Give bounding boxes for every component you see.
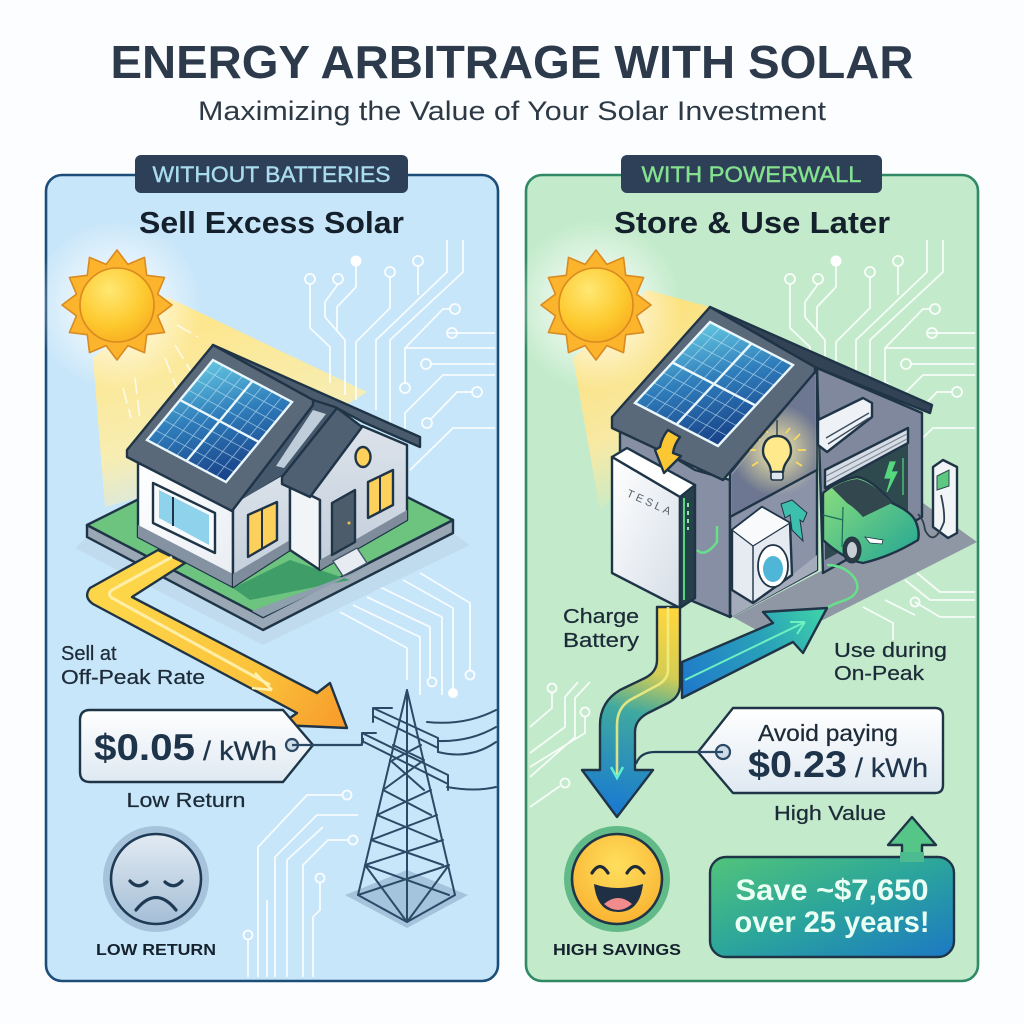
badge: with powerwall: WITH POWERWALL	[642, 162, 862, 187]
large window	[153, 483, 215, 553]
steps	[333, 548, 367, 576]
subtitle: Maximizing the Value of Your Solar Investment	[198, 96, 827, 126]
icon: sun	[32, 220, 202, 390]
logo text: TESLA	[625, 488, 675, 519]
price tag: $0.23 / kWh: / kWh	[855, 753, 928, 783]
beam sparkle rays	[123, 325, 198, 420]
solar panel	[635, 322, 793, 446]
wing side	[290, 470, 320, 570]
lightbulb	[748, 420, 806, 480]
label: sell at off-peak rate: Off-Peak Rate	[61, 667, 205, 689]
side wall	[620, 425, 730, 617]
side wall	[233, 470, 290, 587]
label: use during on-peak: On-Peak	[834, 663, 925, 685]
washing machine	[732, 507, 792, 603]
driveway	[733, 503, 977, 632]
heading: Store & Use Later	[614, 205, 890, 240]
garage interior	[825, 443, 908, 560]
label: charge battery	[563, 606, 639, 652]
solar panel	[147, 360, 292, 482]
powerwall battery	[612, 448, 695, 608]
label: charge battery: Charge	[563, 606, 639, 628]
caption: high value: High Value	[774, 803, 886, 825]
round window	[356, 447, 370, 467]
panel background	[526, 175, 978, 981]
icon: transmission tower	[345, 690, 496, 928]
heading: Sell Excess Solar	[139, 205, 404, 240]
lawn base	[75, 431, 470, 645]
charging bolt	[885, 458, 903, 495]
label: sell at off-peak rate: Sell at	[61, 643, 117, 665]
charging station	[918, 460, 957, 538]
arrow: sell to grid	[87, 550, 347, 728]
roof valley between main and wing roofs	[233, 400, 337, 505]
arrow: charge battery	[582, 607, 680, 817]
solar slope of roof	[612, 307, 815, 480]
sunbeam	[573, 290, 710, 510]
arrow: use during on-peak	[682, 608, 827, 698]
icon: sad face	[103, 826, 209, 932]
price tag: $0.23 / kWh: $0.23	[748, 744, 847, 785]
main roof solar slope	[127, 345, 313, 511]
label: sell at off-peak rate	[61, 643, 205, 689]
sunbeam	[93, 297, 367, 507]
price tag: $0.23 / kWh	[636, 708, 943, 793]
badge: without batteries: WITHOUT BATTERIES	[152, 162, 390, 187]
arrow: up to high value	[888, 817, 936, 860]
door	[332, 490, 355, 555]
circuit traces	[244, 240, 495, 977]
room floor line	[730, 470, 817, 517]
main roof dark slope	[213, 345, 420, 447]
t-shirt	[781, 500, 807, 541]
label: charge battery: Battery	[563, 630, 639, 652]
icon: happy face	[564, 826, 670, 932]
label: use during on-peak	[834, 640, 947, 685]
left wall	[138, 463, 233, 587]
attic room	[732, 372, 815, 517]
badge: without batteries	[135, 155, 408, 193]
label: use during on-peak: Use during	[834, 640, 947, 662]
wing roof	[276, 408, 362, 497]
price tag: $0.23 / kWh: Avoid paying	[758, 720, 898, 746]
badge: with powerwall	[621, 155, 882, 193]
title: ENERGY ARBITRAGE WITH SOLAR	[110, 36, 914, 88]
savings callout: over 25 years!	[734, 906, 930, 939]
caption: low return badge: LOW RETURN	[96, 942, 216, 959]
panel background	[46, 175, 498, 981]
savings callout	[710, 817, 954, 957]
air conditioner	[818, 398, 872, 452]
wing front	[310, 426, 407, 570]
panel: with powerwall	[511, 155, 978, 981]
interior wall	[730, 370, 817, 617]
green power lines	[697, 526, 857, 608]
price tag: $0.05 / kWh: / kWh	[203, 736, 277, 766]
savings callout: Save ~$7,650	[736, 874, 928, 907]
price tag: $0.05 / kWh: $0.05	[94, 727, 195, 768]
illustration: house cutaway	[612, 307, 977, 632]
garage wall	[817, 368, 922, 573]
garage door	[825, 428, 908, 488]
arrow: panel to battery	[655, 430, 681, 473]
icon: sun	[511, 220, 681, 390]
caption: high savings: HIGH SAVINGS	[553, 942, 681, 959]
wing window	[368, 470, 393, 518]
panel: without batteries	[32, 155, 498, 981]
price tag: $0.05 / kWh	[80, 710, 363, 782]
dark slope of roof	[710, 307, 932, 413]
caption: low return: Low Return	[126, 790, 246, 812]
circuit traces	[530, 240, 975, 807]
side window	[248, 502, 277, 557]
illustration: house on lawn	[75, 345, 470, 645]
electric car	[823, 477, 919, 563]
